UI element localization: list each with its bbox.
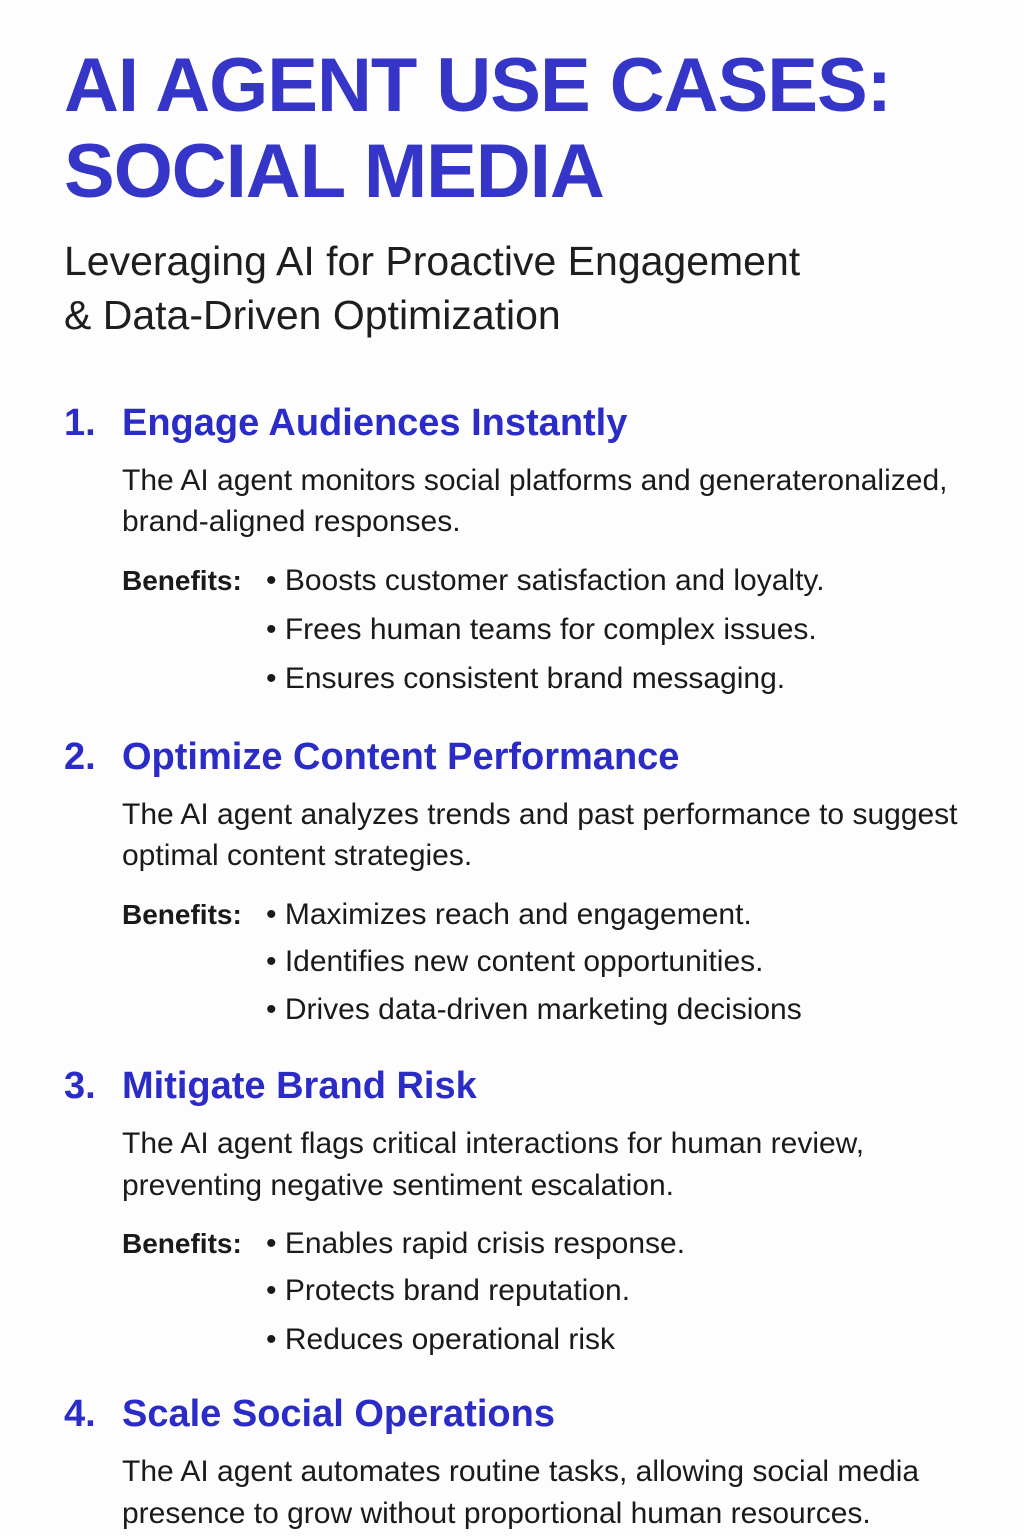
description 2: The AI agent analyzes trends and past performance to suggest — [122, 798, 958, 831]
benefits 1: • Boosts customer satisfaction and loyalty. — [266, 564, 825, 597]
section 2 — [64, 736, 958, 1026]
section 3 — [64, 1065, 864, 1356]
section 2: Optimize Content Performance — [122, 736, 679, 778]
section 1 — [64, 402, 947, 695]
title: AI AGENT USE CASES: — [64, 43, 891, 128]
benefits 2: • Maximizes reach and engagement. — [266, 898, 752, 931]
section 4: Scale Social Operations — [122, 1393, 555, 1435]
section 3: Mitigate Brand Risk — [122, 1065, 477, 1107]
benefits 3: • Enables rapid crisis response. — [266, 1227, 685, 1260]
heading 2 — [64, 736, 679, 778]
description 2: optimal content strategies. — [122, 839, 472, 872]
benefits 1: Benefits: — [122, 565, 242, 596]
description 1 — [122, 464, 947, 538]
benefits 1: • Ensures consistent brand messaging. — [266, 662, 785, 695]
description 1: brand-aligned responses. — [122, 505, 461, 538]
benefits 2 — [122, 898, 802, 1026]
title: SOCIAL MEDIA — [64, 129, 604, 214]
benefits 3 — [122, 1227, 685, 1356]
description 4 — [122, 1455, 920, 1530]
benefits 3: • Protects brand reputation. — [266, 1274, 630, 1307]
benefits 1: • Frees human teams for complex issues. — [266, 613, 817, 646]
heading 4 — [64, 1393, 555, 1435]
heading 1: 1. — [64, 402, 96, 444]
heading 1 — [64, 402, 628, 444]
benefits 2: • Drives data-driven marketing decisions — [266, 993, 802, 1026]
subtitle — [64, 238, 800, 338]
benefits 2: • Identifies new content opportunities. — [266, 945, 763, 978]
subtitle: Leveraging AI for Proactive Engagement — [64, 238, 800, 284]
section 1: Engage Audiences Instantly — [122, 402, 627, 444]
benefits 3: Benefits: — [122, 1228, 242, 1259]
description 3: preventing negative sentiment escalation. — [122, 1169, 674, 1202]
description 1: The AI agent monitors social platforms and generateronalized, — [122, 464, 947, 497]
benefits 3: • Reduces operational risk — [266, 1323, 615, 1356]
section 4 — [64, 1393, 920, 1530]
benefits 2: Benefits: — [122, 899, 242, 930]
description 3 — [122, 1127, 864, 1202]
description 3: The AI agent flags critical interactions for human review, — [122, 1127, 864, 1160]
subtitle: & Data-Driven Optimization — [64, 292, 561, 338]
description 4: presence to grow without proportional human resources. — [122, 1497, 871, 1530]
benefits 1 — [122, 564, 825, 695]
heading 2: 2. — [64, 736, 96, 778]
heading 3: 3. — [64, 1065, 96, 1107]
description 2 — [122, 798, 958, 872]
heading 3 — [64, 1065, 477, 1107]
description 4: The AI agent automates routine tasks, allowing social media — [122, 1455, 919, 1488]
heading 4: 4. — [64, 1393, 96, 1435]
title — [64, 43, 891, 214]
